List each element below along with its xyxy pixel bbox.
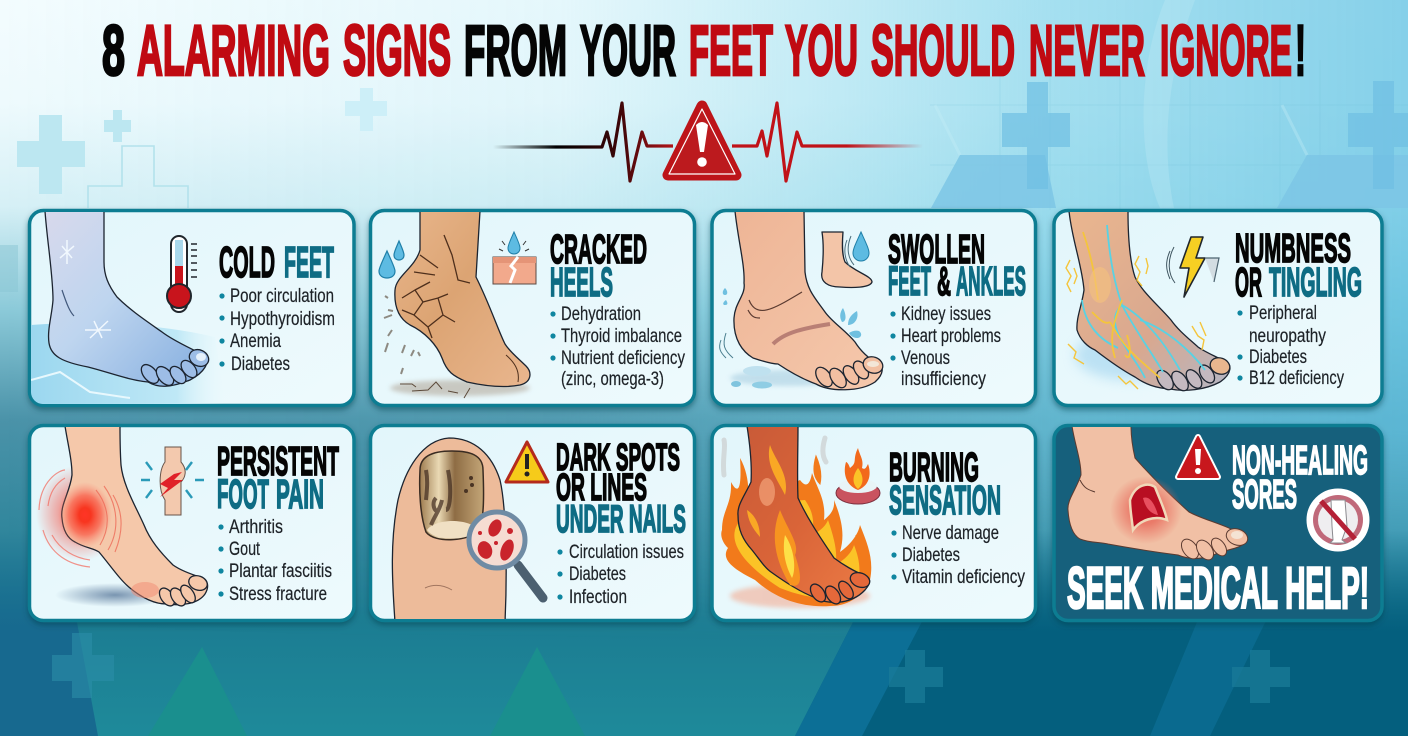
title: SHOULD xyxy=(871,12,1015,91)
list xyxy=(557,542,684,608)
title: ALARMING xyxy=(137,12,330,91)
list: Nerve damage xyxy=(902,523,999,544)
heading xyxy=(889,444,1001,523)
illustration: foot with heel pain xyxy=(36,426,209,609)
title: NEVER xyxy=(1029,12,1145,91)
list: Nutrient deficiency xyxy=(561,348,685,369)
heading: COLD xyxy=(219,238,275,287)
title: YOUR xyxy=(580,12,676,91)
illustration: foot in flames xyxy=(721,426,872,608)
heading: FEET xyxy=(888,258,931,304)
heading xyxy=(1232,437,1368,517)
list xyxy=(1237,303,1344,389)
title: FROM xyxy=(464,12,567,91)
list: Stress fracture xyxy=(229,584,327,605)
illustration: cracked heel xyxy=(384,211,530,398)
text: ! xyxy=(1295,12,1306,91)
list: B12 deficiency xyxy=(1249,368,1344,389)
icon: no-touch prohibition sign xyxy=(1308,490,1368,550)
title xyxy=(102,12,1306,91)
list xyxy=(550,304,685,390)
list: insufficiency xyxy=(901,369,986,390)
icon: warning triangle xyxy=(1178,437,1218,477)
illustration: foot with nerves xyxy=(1066,211,1232,394)
list: Plantar fasciitis xyxy=(229,561,332,582)
list: Hypothyroidism xyxy=(230,309,335,330)
heartbeat line with warning triangle xyxy=(493,103,923,181)
heading: PAIN xyxy=(276,471,324,517)
heading xyxy=(217,438,339,517)
heading xyxy=(550,226,647,305)
illustration: swollen foot xyxy=(720,211,885,391)
panel: cold feet xyxy=(30,210,354,406)
panel: persistent foot pain: PERSISTENT xyxy=(217,438,339,484)
icon: water drops xyxy=(379,241,404,278)
heading: SORES xyxy=(1232,471,1297,517)
title: FEET xyxy=(689,12,773,91)
heading: SWOLLEN xyxy=(888,226,985,272)
icon: magnifier with blood cells xyxy=(469,512,543,598)
heading: OR xyxy=(1235,259,1262,305)
list: Heart problems xyxy=(901,326,1001,347)
list xyxy=(219,286,335,375)
heading: BURNING xyxy=(889,444,979,490)
list: (zinc, omega-3) xyxy=(561,369,664,390)
icon: warning triangle xyxy=(668,106,736,175)
list: Circulation issues xyxy=(569,542,684,563)
list: Poor circulation xyxy=(230,286,334,307)
panel: cracked heels: CRACKED xyxy=(550,226,647,272)
heading xyxy=(556,437,686,541)
title: SIGNS xyxy=(343,12,451,91)
heading: FOOT xyxy=(217,471,269,517)
icon: thermometer xyxy=(167,236,197,312)
heading xyxy=(888,226,1026,304)
icon: warning triangle xyxy=(506,442,548,482)
list xyxy=(218,517,332,605)
heading: & xyxy=(937,258,951,304)
heading: DARK SPOTS xyxy=(556,437,680,479)
list: Arthritis xyxy=(229,517,283,538)
title: 8 xyxy=(102,12,125,91)
icon: small foot with drop xyxy=(822,232,872,287)
panel: dark spots or lines under nails xyxy=(370,426,694,622)
heading: HEELS xyxy=(550,259,613,305)
panel: persistent foot pain xyxy=(30,426,354,620)
list: Anemia xyxy=(230,331,281,352)
list xyxy=(891,523,1025,588)
panel: cold feet: FEET xyxy=(284,238,334,287)
panel: burning sensation: SENSATION xyxy=(889,477,1001,523)
icon: cracked skin with drop xyxy=(493,232,536,284)
icon: lightning bolt xyxy=(1167,237,1219,297)
illustration: frozen foot on ice xyxy=(31,211,225,404)
list: Kidney issues xyxy=(901,304,991,325)
list: Diabetes xyxy=(1249,347,1307,368)
list: Thyroid imbalance xyxy=(561,326,682,347)
illustration: big toe with dark nail xyxy=(392,438,506,622)
panel: burning sensation xyxy=(712,426,1036,620)
list xyxy=(890,304,1001,390)
panel: non-healing sores xyxy=(1054,426,1382,621)
icon: flame on hot pad xyxy=(836,448,880,504)
list: Infection xyxy=(569,587,627,608)
panel: swollen feet and ankles xyxy=(712,210,1036,406)
text: ANKLES xyxy=(956,258,1026,304)
list: Dehydration xyxy=(561,304,641,325)
illustration: foot with wound xyxy=(1068,426,1250,563)
list: Diabetes xyxy=(902,545,960,566)
list: Diabetes xyxy=(569,564,626,585)
list: Venous xyxy=(901,348,950,369)
icon: joint with lightning xyxy=(141,447,204,515)
list: Vitamin deficiency xyxy=(902,567,1025,588)
heading: OR LINES xyxy=(556,467,647,509)
list: Gout xyxy=(229,539,261,560)
panel: dark spots or lines under nails: UNDER NAILS xyxy=(556,498,686,541)
list: Diabetes xyxy=(231,354,290,375)
title: YOU xyxy=(785,12,858,91)
heading xyxy=(1235,225,1362,305)
list: Peripheral xyxy=(1249,303,1317,324)
panel: cracked heels xyxy=(370,210,694,406)
list: neuropathy xyxy=(1249,326,1326,347)
panel: numbness or tingling xyxy=(1054,210,1382,406)
